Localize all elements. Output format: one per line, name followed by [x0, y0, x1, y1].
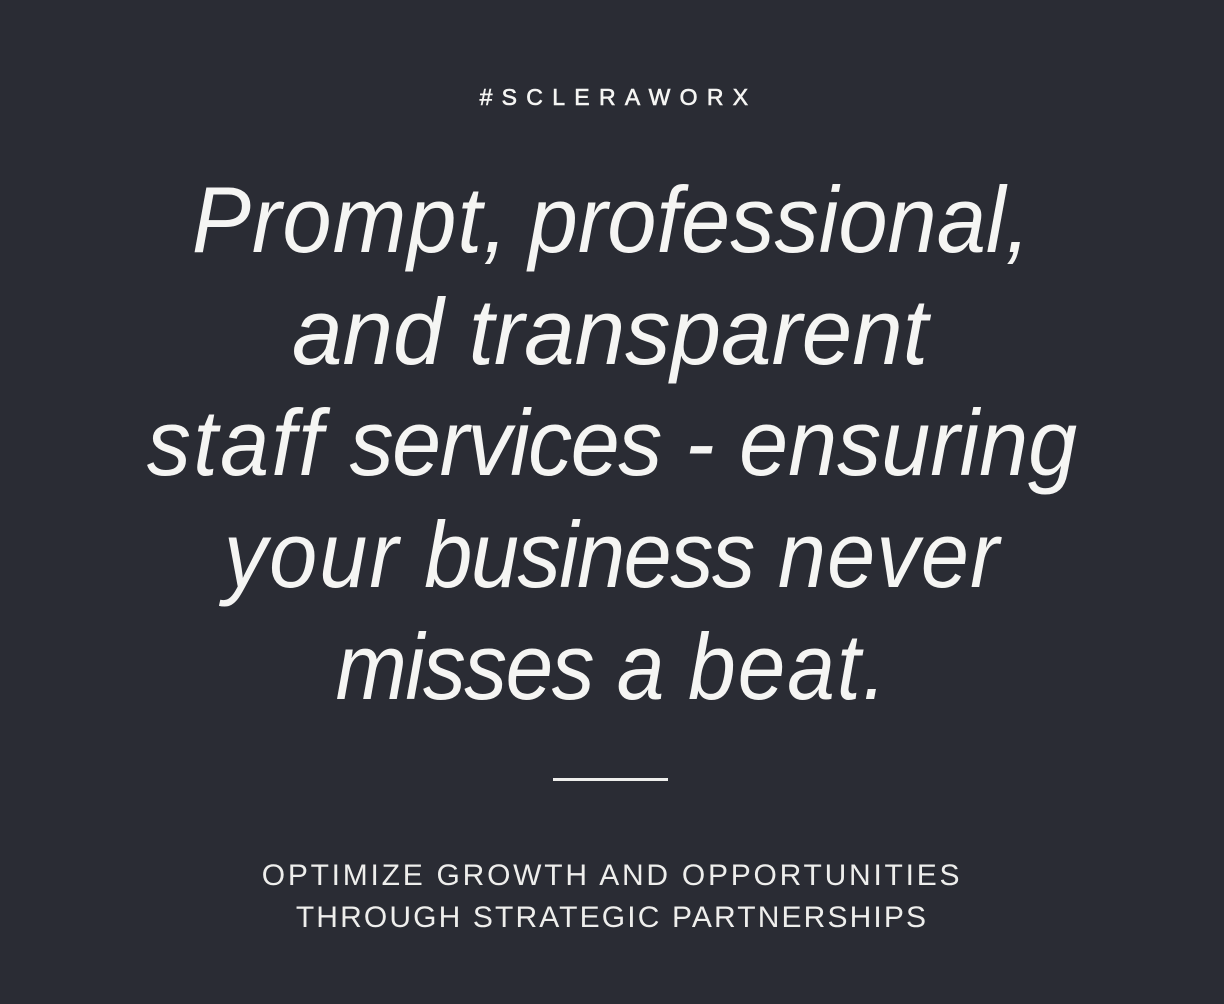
hashtag: #SCLERAWORX — [480, 84, 757, 110]
headline quote: your business never — [224, 502, 1000, 607]
headline quote: staff services - ensuring — [147, 390, 1077, 495]
headline quote: Prompt, professional, — [192, 167, 1030, 272]
headline quote — [147, 167, 1077, 719]
tagline: OPTIMIZE GROWTH AND OPPORTUNITIES — [262, 859, 962, 892]
tagline — [262, 859, 962, 934]
headline quote: misses a beat. — [336, 614, 888, 719]
tagline: THROUGH STRATEGIC PARTNERSHIPS — [296, 901, 928, 934]
headline quote: and transparent — [292, 279, 928, 384]
divider line — [553, 778, 668, 781]
